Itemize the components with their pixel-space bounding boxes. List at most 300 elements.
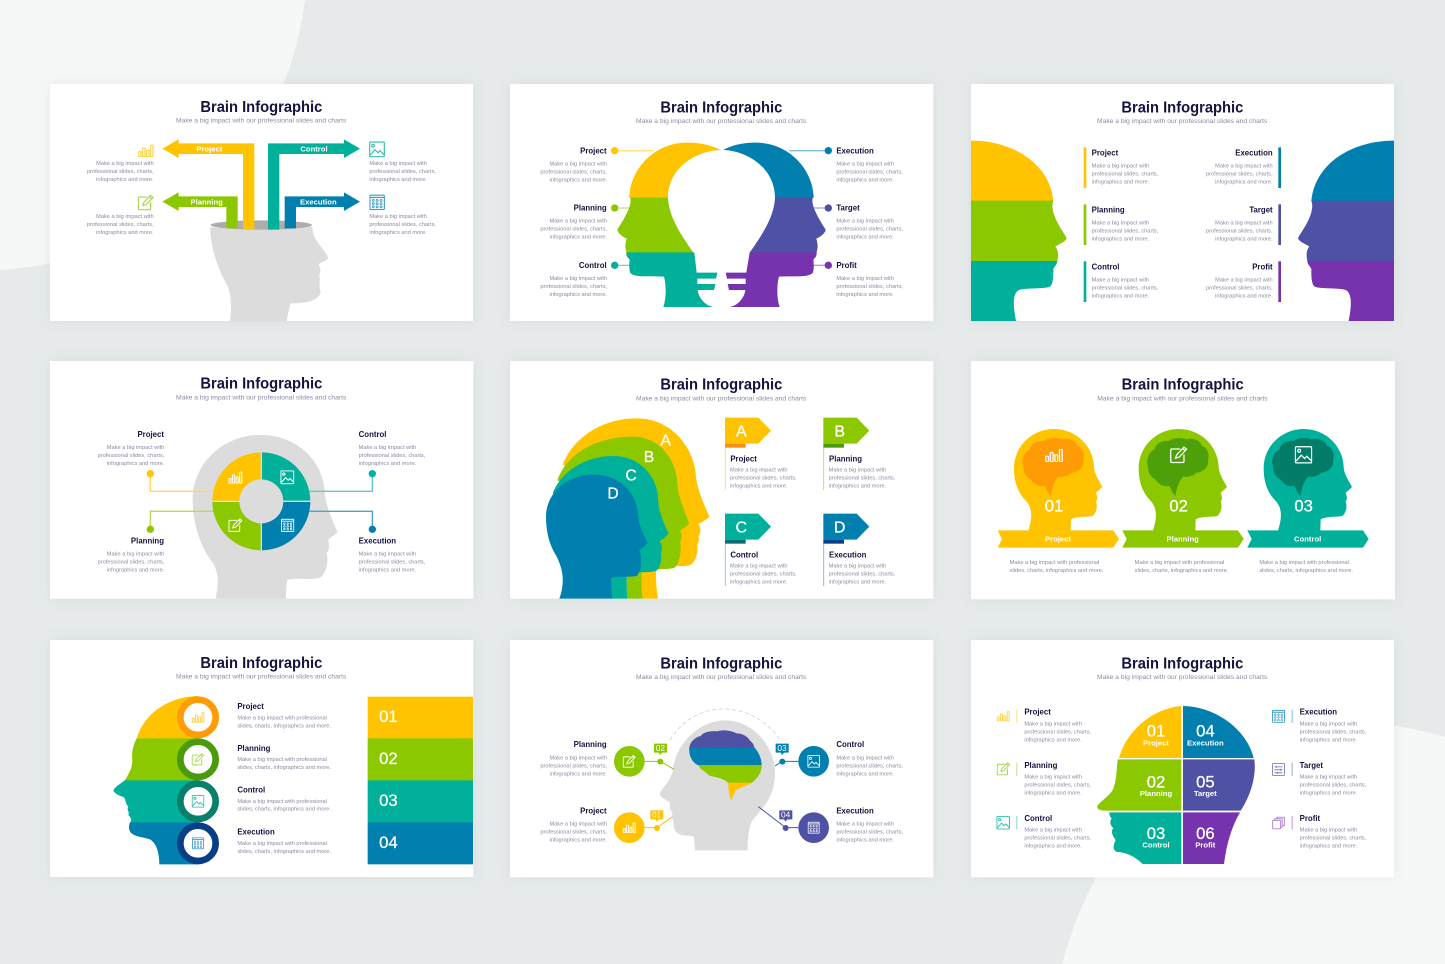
icon: image bbox=[281, 471, 294, 484]
icon: bar chart bbox=[997, 712, 1009, 721]
flag B: B bbox=[834, 423, 845, 440]
text: Planning: Make a big impact with professional bbox=[237, 757, 327, 763]
text: Control: Make a big impact with bbox=[1024, 828, 1082, 834]
text: Execution: Execution bbox=[1300, 708, 1337, 717]
left head bbox=[971, 141, 1067, 321]
panel 1: arrows from head bbox=[50, 84, 473, 321]
icon: sliders bbox=[1273, 764, 1284, 775]
icon: edit bbox=[229, 519, 242, 531]
text: Planning: professional slides, charts, bbox=[540, 763, 607, 769]
title: Brain Infographic bbox=[1121, 655, 1244, 672]
text: Control: Make a big impact with bbox=[359, 445, 416, 451]
text: Project: slides, charts, infographics and more. bbox=[237, 723, 331, 729]
text: Control: professional slides, charts, bbox=[1092, 286, 1159, 292]
text: Execution: Make a big impact with bbox=[359, 552, 416, 558]
text: Project: professional slides, charts, bbox=[540, 169, 607, 175]
text: Execution: Execution bbox=[359, 536, 396, 545]
circle: edit bbox=[180, 742, 216, 777]
text: Target: infographics and more. bbox=[1215, 236, 1273, 242]
text: Execution: professional slides, charts, bbox=[369, 222, 436, 228]
text: Project: professional slides, charts, bbox=[1092, 171, 1159, 177]
panel 6: three heads with ribbons bbox=[971, 361, 1395, 599]
text: Project: Project bbox=[580, 146, 607, 155]
text: Project: Make a big impact with bbox=[730, 468, 788, 474]
text: Profit: Make a big impact with bbox=[1300, 828, 1357, 834]
icon: calendar grid bbox=[282, 519, 294, 531]
icon: grid bbox=[1273, 710, 1284, 722]
segment 05 Target bbox=[1183, 759, 1255, 811]
text: Control bbox=[1092, 263, 1159, 300]
text: Control: Control bbox=[1024, 814, 1052, 823]
text: Profit bbox=[1300, 814, 1367, 850]
panel 9: six-part head bbox=[971, 640, 1394, 877]
text: Target: Target bbox=[836, 204, 860, 213]
subtitle: Make a big impact with our professional slides and charts bbox=[176, 674, 347, 681]
segment 06 Profit: 06 bbox=[1196, 824, 1215, 843]
text: Project: Make a big impact with professional bbox=[237, 715, 327, 721]
title: Brain Infographic bbox=[660, 655, 783, 672]
text: Planning: infographics and more. bbox=[96, 230, 154, 236]
text: Control: infographics and more. bbox=[359, 461, 417, 467]
text: Control: infographics and more. bbox=[836, 771, 894, 777]
callout 01 Project bbox=[614, 810, 672, 843]
text: Control: Control bbox=[579, 261, 607, 270]
text: Target: Target bbox=[1249, 206, 1273, 215]
text: Execution bbox=[359, 536, 426, 574]
callout 03 Control bbox=[775, 743, 829, 777]
text: Execution: infographics and more. bbox=[1215, 179, 1273, 185]
head 03: Control bbox=[1294, 534, 1321, 543]
text: Planning: Make a big impact with bbox=[96, 214, 154, 220]
text: Profit: Profit bbox=[836, 261, 857, 270]
text: Execution: professional slides, charts, bbox=[836, 169, 903, 175]
head 01: Project bbox=[1045, 534, 1071, 543]
text: Project: Make a big impact with bbox=[549, 822, 607, 828]
text: Project: Project bbox=[580, 807, 607, 816]
text: Planning: Make a big impact with bbox=[549, 219, 607, 225]
text: Planning: professional slides, charts, bbox=[1092, 228, 1159, 234]
striped head bbox=[113, 696, 198, 864]
background blob: bottom right bbox=[1062, 721, 1445, 964]
text: Project: professional slides, charts, bbox=[98, 453, 165, 459]
text: Project: Project bbox=[237, 702, 264, 711]
text: Project: Make a big impact with bbox=[1024, 721, 1082, 727]
head letters: A bbox=[660, 433, 671, 450]
text: Execution: Execution bbox=[237, 828, 275, 837]
text: Project: infographics and more. bbox=[96, 177, 154, 183]
right head bbox=[723, 143, 826, 307]
text: Project bbox=[730, 454, 797, 490]
text: Planning bbox=[98, 536, 165, 574]
text: Project: slides, charts, infographics and more. bbox=[1010, 568, 1104, 574]
text: Execution: Execution bbox=[829, 550, 867, 559]
text: Project: infographics and more. bbox=[549, 838, 607, 844]
text: Execution: infographics and more. bbox=[836, 177, 894, 183]
numbered blocks: 01 bbox=[379, 707, 398, 726]
title: Brain Infographic bbox=[200, 99, 323, 116]
text: Target bbox=[1206, 206, 1273, 242]
segment 05 Target: 05 bbox=[1196, 772, 1215, 791]
text: Planning bbox=[540, 204, 607, 241]
text: Project: Project bbox=[137, 430, 164, 439]
text: Control: professional slides, charts, bbox=[540, 284, 607, 290]
flag B bbox=[823, 418, 869, 490]
arrow: Planning: Planning bbox=[191, 197, 223, 206]
text: Project: professional slides, charts, bbox=[540, 830, 607, 836]
segment 03 Control: 03 bbox=[1147, 824, 1165, 843]
text: Planning: infographics and more. bbox=[107, 568, 165, 574]
title: Brain Infographic bbox=[1121, 99, 1244, 116]
text: Target: Make a big impact with bbox=[1215, 220, 1273, 226]
ring: four quadrants bbox=[212, 452, 310, 550]
text: Project: Make a big impact with bbox=[107, 445, 164, 451]
text: Control: Control bbox=[730, 550, 758, 559]
text: Execution: Make a big impact with bbox=[836, 161, 894, 167]
subtitle: Make a big impact with our professional slides and charts bbox=[1097, 395, 1268, 402]
text: Planning: Make a big impact with bbox=[107, 552, 164, 558]
text: Project: Project bbox=[730, 454, 757, 463]
text: Target: professional slides, charts, bbox=[836, 227, 903, 233]
text: Control: Control bbox=[359, 430, 386, 439]
panel 3: facing heads bbox=[971, 84, 1394, 321]
text: Control bbox=[237, 786, 331, 813]
head 02: 02 bbox=[1169, 496, 1188, 515]
text: Control: Make a big impact with bbox=[369, 161, 427, 167]
text: Control: Make a big impact with professional bbox=[1259, 560, 1349, 566]
circle: bar chart bbox=[180, 700, 216, 735]
head 03: 03 bbox=[1294, 496, 1313, 515]
icon: bar chart bbox=[229, 472, 242, 483]
text: Planning: professional slides, charts, bbox=[98, 560, 165, 566]
connector lines bbox=[615, 151, 828, 265]
striped brain bbox=[689, 730, 762, 800]
text: Control: Control bbox=[1092, 263, 1119, 272]
text: Target: Target bbox=[1300, 761, 1323, 770]
layered heads bbox=[546, 418, 709, 599]
text: Project: Make a big impact with bbox=[1092, 163, 1149, 169]
text: Profit bbox=[1206, 263, 1273, 300]
text: Target: infographics and more. bbox=[1300, 790, 1358, 796]
callout 04 Execution: 04 bbox=[781, 810, 791, 820]
icon: bar chart bbox=[139, 145, 153, 156]
arrow: Control bbox=[268, 139, 360, 230]
text: Planning: Planning bbox=[1024, 761, 1058, 770]
text: Project: professional slides, charts, bbox=[87, 169, 154, 175]
text: Planning: Planning bbox=[131, 536, 164, 545]
flag D bbox=[823, 514, 869, 586]
text: Planning: infographics and more. bbox=[829, 484, 887, 490]
text: Project: infographics and more. bbox=[549, 177, 607, 183]
text: Project bbox=[237, 702, 331, 729]
text: Planning: professional slides, charts, bbox=[829, 476, 896, 482]
callout 01 Project: 01 bbox=[652, 810, 662, 820]
segment 01 Project bbox=[1119, 706, 1181, 758]
grey head silhouette bbox=[660, 720, 775, 850]
text: Control: Make a big impact with bbox=[836, 755, 894, 761]
numbered blocks bbox=[368, 697, 473, 864]
numbered blocks: 04 bbox=[379, 833, 398, 852]
left head bbox=[617, 143, 721, 307]
arrow: Execution bbox=[285, 192, 360, 228]
icon: edit bbox=[138, 195, 153, 210]
text: Execution: Execution bbox=[836, 807, 874, 816]
text: Execution: Make a big impact with bbox=[829, 564, 886, 570]
text: Planning bbox=[540, 740, 607, 777]
arrow: Project bbox=[162, 139, 254, 230]
text: Project bbox=[540, 146, 607, 183]
arrow: Execution: Execution bbox=[300, 197, 337, 206]
panel 2: two heads forming a light bulb bbox=[510, 84, 933, 321]
text: Control: Make a big impact with bbox=[549, 276, 607, 282]
text: Execution: Make a big impact with professional bbox=[237, 841, 327, 847]
text: Control: infographics and more. bbox=[1092, 294, 1150, 300]
numbered blocks: 03 bbox=[379, 791, 398, 810]
icon: image bbox=[370, 142, 384, 157]
text: Planning: professional slides, charts, bbox=[1024, 782, 1091, 788]
segment 04 Execution: Execution bbox=[1187, 738, 1224, 747]
text: Target: Make a big impact with bbox=[1300, 774, 1357, 780]
circle: image bbox=[180, 784, 216, 819]
background blob: top left bbox=[0, 0, 305, 270]
text: Control: infographics and more. bbox=[549, 292, 607, 298]
text: Project: infographics and more. bbox=[730, 484, 788, 490]
text: Control: professional slides, charts, bbox=[730, 572, 797, 578]
text: Planning: professional slides, charts, bbox=[540, 227, 607, 233]
text: Control: professional slides, charts, bbox=[1024, 836, 1091, 842]
text: Planning: Planning bbox=[829, 454, 862, 463]
text: Profit: professional slides, charts, bbox=[1206, 286, 1273, 292]
subtitle: Make a big impact with our professional slides and charts bbox=[636, 395, 807, 402]
text: Target bbox=[1300, 761, 1367, 796]
text: Control bbox=[540, 261, 607, 298]
text: Planning bbox=[237, 744, 331, 771]
text: Execution: professional slides, charts, bbox=[836, 830, 903, 836]
text: Planning: infographics and more. bbox=[1092, 236, 1150, 242]
text: Control bbox=[836, 740, 903, 777]
text: Planning: Make a big impact with bbox=[1092, 220, 1149, 226]
head 01 bbox=[998, 429, 1119, 548]
title: Brain Infographic bbox=[660, 376, 783, 393]
text: Project: professional slides, charts, bbox=[730, 476, 797, 482]
text: Project: infographics and more. bbox=[107, 461, 165, 467]
text: Profit: Make a big impact with bbox=[836, 276, 894, 282]
subtitle: Make a big impact with our professional slides and charts bbox=[176, 118, 347, 125]
subtitle: Make a big impact with our professional slides and charts bbox=[1097, 674, 1268, 681]
text: Profit: infographics and more. bbox=[1215, 294, 1273, 300]
text: Planning: professional slides, charts, bbox=[87, 222, 154, 228]
text: Execution: Make a big impact with bbox=[836, 822, 894, 828]
text: Project: infographics and more. bbox=[1092, 179, 1150, 185]
text: Profit: Make a big impact with bbox=[1215, 278, 1273, 284]
callout 03 Control: 03 bbox=[777, 743, 787, 753]
marker dots bbox=[611, 147, 832, 269]
head 03 bbox=[1247, 429, 1369, 548]
text: Control: Make a big impact with bbox=[730, 564, 788, 570]
text: Target: professional slides, charts, bbox=[1206, 228, 1273, 234]
text: Execution bbox=[1206, 149, 1273, 185]
subtitle: Make a big impact with our professional slides and charts bbox=[636, 118, 807, 125]
icon: edit bbox=[997, 763, 1009, 775]
icon: image bbox=[997, 817, 1009, 829]
text: Planning bbox=[1024, 761, 1091, 796]
text: Control: slides, charts, infographics and more. bbox=[1259, 568, 1353, 574]
text: Project bbox=[540, 807, 607, 844]
head 02 bbox=[1122, 429, 1244, 548]
text: Control: infographics and more. bbox=[1024, 844, 1082, 850]
text: Control bbox=[730, 550, 797, 586]
text: Control: Control bbox=[237, 786, 265, 795]
text: Execution bbox=[836, 146, 903, 183]
text: Execution bbox=[1300, 708, 1367, 743]
callout 02 Planning bbox=[614, 743, 674, 777]
text: Planning bbox=[1092, 206, 1159, 242]
text: Execution: infographics and more. bbox=[359, 568, 417, 574]
flag D: D bbox=[834, 519, 845, 536]
segment 03 Control bbox=[1109, 812, 1181, 864]
icon: layers bbox=[1273, 817, 1284, 829]
text: Control: infographics and more. bbox=[369, 177, 427, 183]
callout 04 Execution bbox=[758, 807, 829, 843]
text: Control: Make a big impact with professional bbox=[237, 799, 327, 805]
title: Brain Infographic bbox=[1122, 376, 1244, 393]
text: Profit: professional slides, charts, bbox=[1300, 836, 1367, 842]
arrow: Control: Control bbox=[300, 144, 328, 153]
text: Control bbox=[359, 430, 426, 467]
text: Planning: Make a big impact with professional bbox=[1135, 560, 1224, 566]
segment 01 Project: Project bbox=[1143, 738, 1169, 747]
text: Control: Make a big impact with bbox=[1092, 278, 1149, 284]
segment 06 Profit bbox=[1183, 812, 1240, 864]
right head bbox=[1298, 141, 1394, 321]
connector lines bbox=[150, 474, 372, 529]
segment 06 Profit: Profit bbox=[1195, 841, 1216, 850]
segment 02 Planning: Planning bbox=[1140, 789, 1172, 798]
arrow: Planning bbox=[162, 192, 238, 228]
text: Execution: professional slides, charts, bbox=[359, 560, 426, 566]
text: Profit: professional slides, charts, bbox=[836, 284, 903, 290]
text: Project bbox=[1092, 149, 1159, 185]
text: Project: Make a big impact with bbox=[549, 161, 607, 167]
text: Execution: infographics and more. bbox=[836, 838, 894, 844]
text: Project bbox=[1024, 708, 1091, 743]
text: Planning: slides, charts, infographics and more. bbox=[237, 765, 331, 771]
flag A: A bbox=[736, 423, 747, 440]
text: Project: Project bbox=[1024, 708, 1051, 717]
subtitle: Make a big impact with our professional slides and charts bbox=[636, 674, 807, 681]
text: Execution: Make a big impact with bbox=[1300, 721, 1357, 727]
text: Execution: Make a big impact with bbox=[1215, 163, 1273, 169]
segment 01 Project: 01 bbox=[1147, 722, 1165, 741]
text: Target: Make a big impact with bbox=[836, 219, 894, 225]
callout 02 Planning: 02 bbox=[656, 743, 665, 753]
text: Project bbox=[98, 430, 165, 467]
title: Brain Infographic bbox=[200, 376, 323, 393]
text: Planning: Make a big impact with bbox=[829, 468, 886, 474]
text: Project: infographics and more. bbox=[1024, 737, 1082, 743]
text: Profit: Profit bbox=[1300, 814, 1320, 823]
text: Execution bbox=[237, 828, 331, 855]
text: Planning: Planning bbox=[237, 744, 271, 753]
text: Execution: infographics and more. bbox=[369, 230, 427, 236]
subtitle: Make a big impact with our professional slides and charts bbox=[1097, 118, 1268, 125]
segment 03 Control: Control bbox=[1142, 841, 1170, 850]
text: Control: Control bbox=[836, 740, 864, 749]
text: Planning bbox=[829, 454, 896, 490]
flag C bbox=[725, 514, 771, 586]
text: Control: professional slides, charts, bbox=[359, 453, 426, 459]
segment 05 Target: Target bbox=[1194, 789, 1217, 798]
panel 5: layered heads with flags bbox=[510, 361, 933, 599]
text: Target bbox=[836, 204, 903, 241]
head 01: 01 bbox=[1045, 496, 1063, 515]
segment 02 Planning: 02 bbox=[1147, 772, 1165, 791]
head letters: D bbox=[607, 486, 619, 503]
text: Execution: professional slides, charts, bbox=[829, 572, 896, 578]
head letters: B bbox=[644, 449, 654, 466]
text: Profit: Profit bbox=[1252, 263, 1273, 272]
accent bars bbox=[1084, 147, 1281, 302]
marker dots bbox=[147, 470, 376, 533]
divider ticks bbox=[1016, 710, 1293, 829]
icon: calendar grid bbox=[370, 195, 384, 210]
panel 8: head with striped brain bbox=[510, 640, 933, 877]
text: Project: Make a big impact with bbox=[96, 161, 154, 167]
grey head silhouette bbox=[193, 435, 337, 599]
text: Profit: infographics and more. bbox=[1300, 844, 1358, 850]
text: Control: slides, charts, infographics and more. bbox=[237, 807, 331, 813]
text: Planning: infographics and more. bbox=[1024, 790, 1082, 796]
text: Planning: infographics and more. bbox=[549, 235, 607, 241]
flag C: C bbox=[736, 519, 747, 536]
subtitle: Make a big impact with our professional slides and charts bbox=[176, 395, 347, 402]
numbered blocks: 02 bbox=[379, 749, 398, 768]
head letters bbox=[607, 433, 671, 503]
text: Control bbox=[1024, 814, 1091, 850]
title: Brain Infographic bbox=[660, 99, 783, 116]
head 02: Planning bbox=[1167, 534, 1199, 543]
text: Project: Project bbox=[1092, 149, 1119, 158]
head letters: C bbox=[625, 467, 637, 484]
text: Profit: infographics and more. bbox=[836, 292, 894, 298]
text: Execution: infographics and more. bbox=[829, 580, 887, 586]
text: Planning: Planning bbox=[574, 740, 607, 749]
text: Execution: Make a big impact with bbox=[369, 214, 427, 220]
segment 02 Planning bbox=[1097, 759, 1181, 811]
text: Control: professional slides, charts, bbox=[836, 763, 903, 769]
text: Project: professional slides, charts, bbox=[1024, 729, 1091, 735]
text: Execution: professional slides, charts, bbox=[1300, 729, 1367, 735]
text: Planning: Planning bbox=[574, 204, 607, 213]
panel 4: ring in head bbox=[50, 361, 473, 599]
text: Control: infographics and more. bbox=[730, 580, 788, 586]
text: Project: Make a big impact with professional bbox=[1010, 560, 1099, 566]
arrow: Project: Project bbox=[196, 144, 223, 153]
title: Brain Infographic bbox=[200, 655, 323, 672]
text: Execution: professional slides, charts, bbox=[1206, 171, 1273, 177]
text: Execution bbox=[836, 807, 903, 844]
segment 04 Execution bbox=[1183, 706, 1254, 758]
text: Planning: slides, charts, infographics and more. bbox=[1135, 568, 1229, 574]
circle: grid bbox=[180, 826, 216, 861]
dashed arc bbox=[670, 709, 780, 740]
text: Target: professional slides, charts, bbox=[1300, 782, 1367, 788]
text: Execution bbox=[829, 550, 896, 586]
text: Profit bbox=[836, 261, 903, 298]
text: Control: professional slides, charts, bbox=[369, 169, 436, 175]
grey head silhouette bbox=[210, 220, 328, 321]
flag A bbox=[725, 418, 771, 490]
panel 7: striped head with numbered blocks bbox=[50, 640, 473, 877]
